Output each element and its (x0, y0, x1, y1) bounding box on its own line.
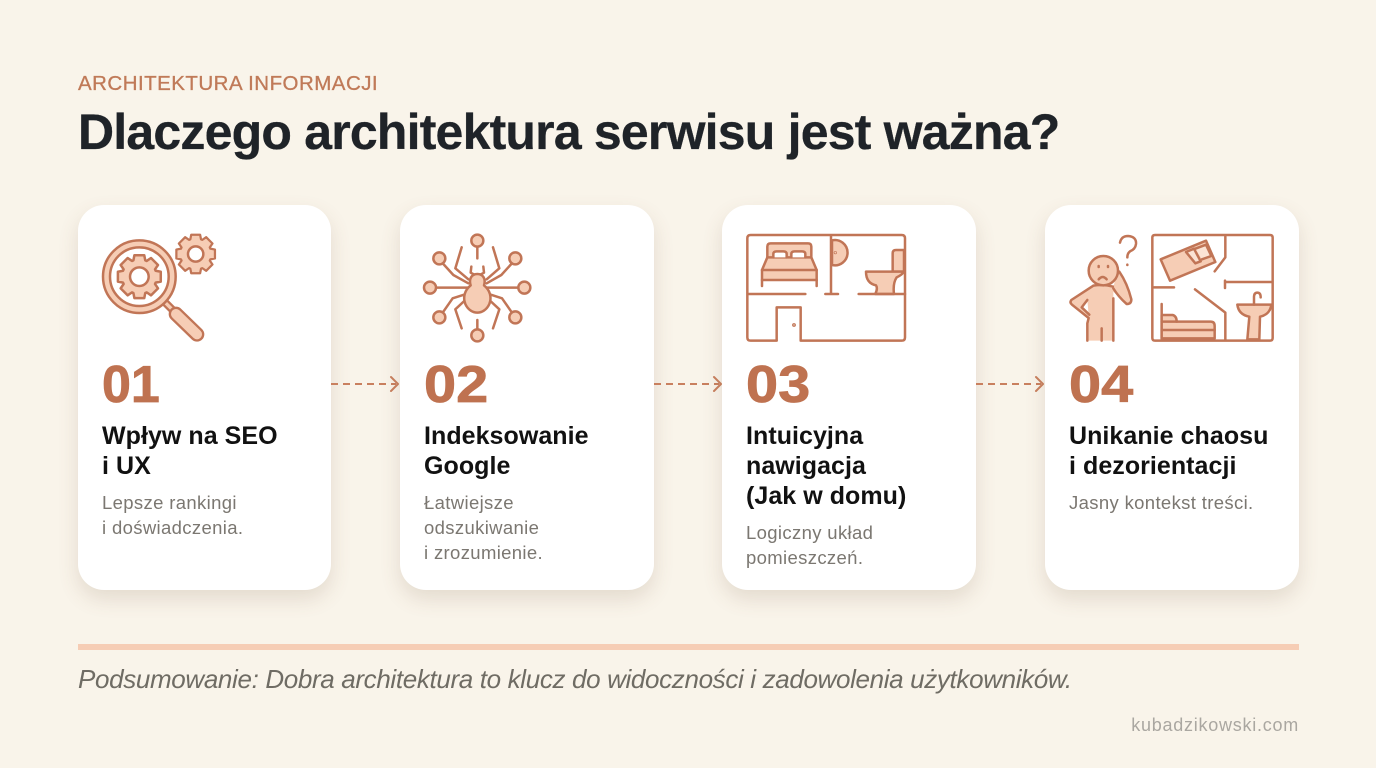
description 1: Lepsze rankingi (102, 492, 237, 513)
footer credit: kubadzikowski.com (1131, 715, 1299, 735)
panel: card 3 (722, 205, 976, 590)
panel: card 1 (78, 205, 331, 590)
panel: card 2 (400, 205, 654, 590)
summary rule (78, 644, 1299, 650)
description 3: Logiczny układ (746, 522, 873, 543)
title: Dlaczego architektura serwisu jest ważna? (78, 104, 1059, 160)
heading 3: nawigacja (746, 452, 866, 480)
icon: confused person and messy floor plan (1069, 234, 1274, 342)
arrow 2 (654, 376, 722, 392)
icon: magnifier with gears (102, 234, 216, 342)
arrow 1 (331, 376, 399, 392)
number 03: 03 (746, 356, 810, 414)
panel: card 4 (1045, 205, 1299, 590)
heading 3: Intuicyjna (746, 422, 863, 450)
description 1: i doświadczenia. (102, 517, 243, 538)
description 3: pomieszczeń. (746, 547, 863, 568)
description 1 (102, 492, 243, 538)
description 2: i zrozumienie. (424, 542, 543, 563)
number 01: 01 (102, 356, 160, 414)
heading 2: Google (424, 452, 510, 480)
heading 2: Indeksowanie (424, 422, 589, 450)
summary text: Podsumowanie: Dobra architektura to klucz do widoczności i zadowolenia użytkowników. (78, 664, 1072, 694)
description 3 (746, 522, 873, 568)
heading 4: Unikanie chaosu (1069, 422, 1268, 450)
eyebrow: ARCHITEKTURA INFORMACJI (78, 72, 378, 95)
description 2: odszukiwanie (424, 517, 539, 538)
heading 2 (424, 422, 589, 480)
heading 4: i dezorientacji (1069, 452, 1236, 480)
heading 3: (Jak w domu) (746, 482, 906, 510)
description 2: Łatwiejsze (424, 492, 514, 513)
arrow 3 (976, 376, 1044, 392)
description 2 (424, 492, 543, 563)
heading 4 (1069, 422, 1268, 480)
number 04: 04 (1069, 356, 1133, 414)
number 02: 02 (424, 356, 488, 414)
heading 1 (102, 422, 278, 480)
heading 3 (746, 422, 906, 510)
icon: orderly floor plan (746, 234, 906, 342)
icon: spider (422, 233, 532, 343)
heading 1: Wpływ na SEO (102, 422, 278, 450)
description 4: Jasny kontekst treści. (1069, 492, 1254, 513)
heading 1: i UX (102, 452, 151, 480)
